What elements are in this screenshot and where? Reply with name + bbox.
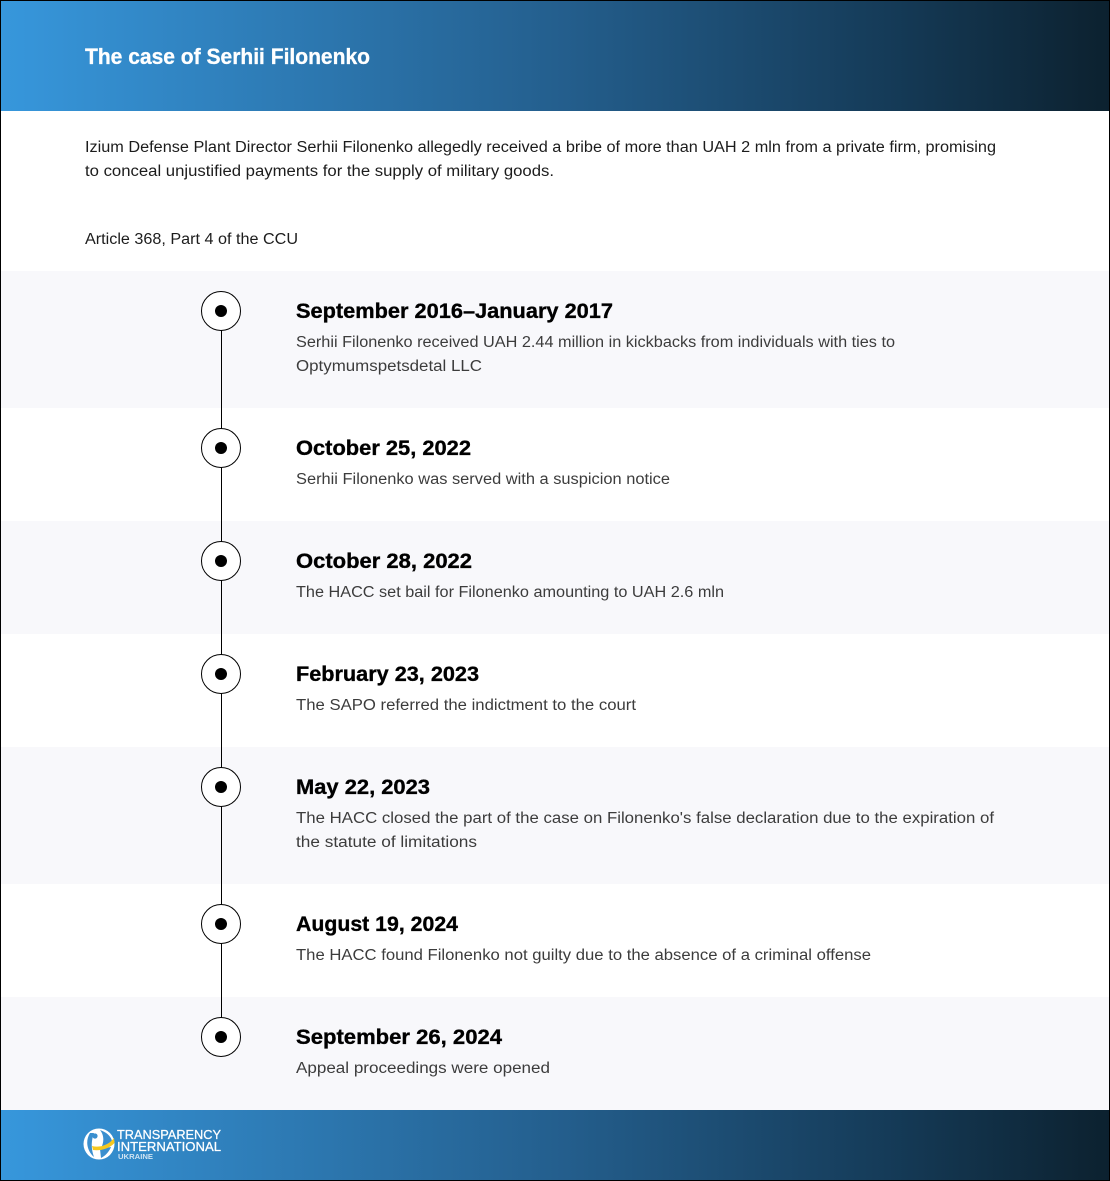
timeline event: October 25, 2022 [202,428,670,488]
timeline event: October 25, 2022: Serhii Filonenko was served with a suspicion notice [296,471,670,488]
timeline event: October 25, 2022: October 25, 2022 [296,437,471,460]
timeline event: August 19, 2024: August 19, 2024 [296,913,458,936]
title: The case of Serhii Filonenko [85,44,370,69]
timeline event: October 28, 2022: The HACC set bail for Filonenko amounting to UAH 2.6 mln [296,584,724,601]
legal article reference: Article 368, Part 4 of the CCU [85,231,298,248]
footer banner [1,1110,1109,1180]
timeline event: August 19, 2024 [202,904,871,964]
intro text: to conceal unjustified payments for the supply of military goods. [85,163,554,180]
timeline event: September 26, 2024: Appeal proceedings were opened [296,1060,550,1077]
timeline event: May 22, 2023: the statute of limitations [296,834,477,851]
timeline event: September 26, 2024: September 26, 2024 [296,1026,502,1049]
logo wordmark: TRANSPARENCY [117,1127,221,1142]
logo wordmark [117,1127,221,1161]
row backgrounds [1,271,1109,1110]
intro text: Izium Defense Plant Director Serhii Filonenko allegedly received a bribe of more than UAH 2 mln from a private firm, promising [85,139,996,156]
timeline event: September 2016–January 2017: Optymumspetsdetal LLC [296,358,482,375]
timeline connector line [220,311,222,1037]
timeline event: May 22, 2023 [202,768,995,851]
timeline event: October 28, 2022 [202,542,724,601]
timeline event: August 19, 2024: The HACC found Filonenko not guilty due to the absence of a criminal offense [296,947,871,964]
logo: Transparency International Ukraine [84,1127,221,1161]
timeline event: September 2016–January 2017 [202,292,895,375]
timeline event: September 2016–January 2017: Serhii Filonenko received UAH 2.44 million in kickbacks from individuals with ties to [296,334,895,351]
timeline event: September 2016–January 2017: September 2016–January 2017 [296,300,613,323]
logo wordmark: UKRAINE [118,1154,153,1161]
timeline event: May 22, 2023: The HACC closed the part of the case on Filonenko's false declaration due to the expiration of [296,810,995,827]
timeline event: September 26, 2024 [202,1018,550,1077]
logo wordmark: INTERNATIONAL [117,1139,221,1154]
timeline event: May 22, 2023: May 22, 2023 [296,776,430,799]
icon: globe with figure [84,1128,114,1160]
timeline event: October 28, 2022: October 28, 2022 [296,550,472,573]
timeline event: February 23, 2023: February 23, 2023 [296,663,479,686]
timeline event: February 23, 2023 [202,654,637,714]
timeline event: February 23, 2023: The SAPO referred the indictment to the court [296,697,637,714]
header banner [1,1,1109,111]
intro text [85,139,996,180]
